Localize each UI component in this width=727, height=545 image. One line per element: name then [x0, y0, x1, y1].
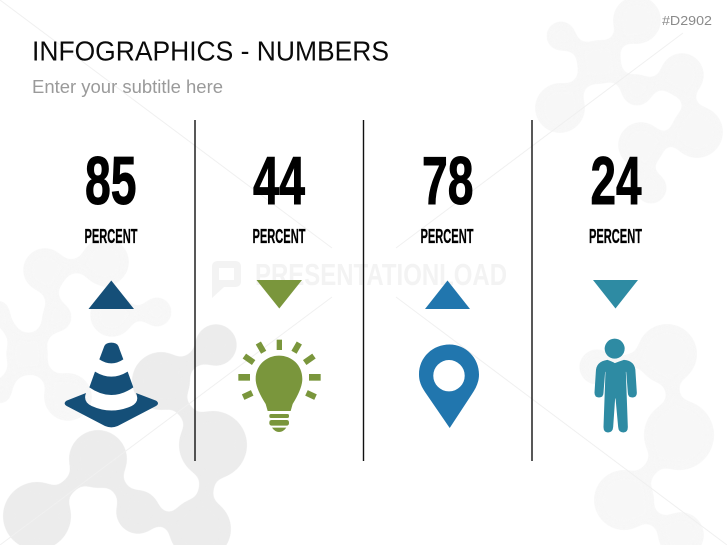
background molecule: left light — [0, 238, 172, 421]
label percent: PERCENT — [420, 225, 474, 248]
icon: person — [595, 339, 636, 432]
number 85: 85 — [85, 143, 136, 219]
subtitle: Enter your subtitle here — [32, 77, 223, 97]
icon: up triangle — [88, 280, 134, 309]
number 24: 24 — [590, 143, 642, 219]
icon: light bulb — [238, 340, 321, 432]
label percent: PERCENT — [252, 225, 306, 248]
background molecule: bottom left dark — [3, 324, 247, 545]
label percent: PERCENT — [84, 225, 138, 248]
panel: column 1 — [65, 143, 158, 427]
column dividers — [195, 120, 532, 461]
icon: down triangle — [593, 280, 638, 308]
watermark: PRESENTATIONLOAD — [255, 257, 507, 292]
number 78: 78 — [422, 143, 474, 219]
document code: #D2902 — [662, 13, 712, 28]
icon: map pin — [419, 344, 479, 428]
watermark — [212, 257, 507, 298]
icon: traffic cone — [65, 343, 158, 427]
label percent: PERCENT — [589, 225, 642, 248]
panel: column 2 — [238, 143, 321, 432]
background molecule: bottom right light — [579, 324, 714, 545]
icon: down triangle — [256, 280, 302, 308]
icon: up triangle — [425, 280, 470, 309]
title: INFOGRAPHICS - NUMBERS — [32, 36, 389, 66]
panel: column 4 — [589, 143, 642, 432]
panel: column 3 — [419, 143, 479, 428]
background molecule: top right light — [535, 0, 723, 204]
number 44: 44 — [253, 143, 305, 219]
